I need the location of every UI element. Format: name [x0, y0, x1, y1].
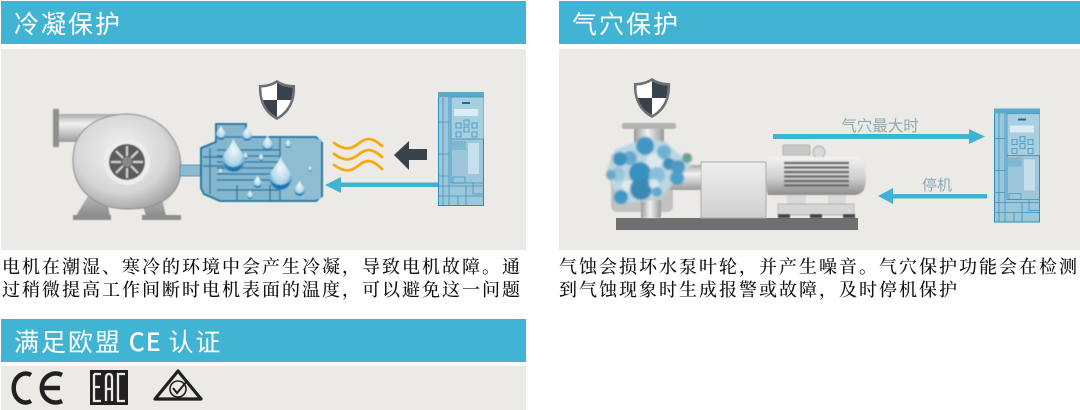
text: condensation description	[2, 253, 522, 302]
arrow: stop	[878, 188, 987, 204]
text: cavitation description: 到气蚀现象时生成报警或故障，及时停机保护	[559, 276, 959, 302]
heading: cavitation protection	[559, 1, 1080, 44]
icon: motor shaft	[180, 165, 202, 176]
icon: cavitation bubbles	[606, 137, 692, 204]
icon: orange heat waves	[334, 139, 382, 170]
icon: coupling guard	[701, 162, 766, 218]
icon: shield	[259, 80, 295, 120]
arrow: max cavitation time	[773, 129, 985, 144]
icon: frequency converter	[994, 108, 1040, 222]
illustration: condensation protection scene	[53, 80, 484, 220]
icon: EAC mark	[90, 370, 128, 405]
panel: condensation illustration background	[1, 49, 526, 250]
label: stop: 停机	[922, 174, 952, 195]
heading: cavitation protection: 气穴保护	[572, 5, 680, 41]
heading: condensation protection	[1, 1, 526, 44]
label: max cavitation time: 气穴最大时	[841, 114, 919, 136]
text: condensation description: 过稍微提高工作间断时电机表面的温度，可以避免这一问题	[2, 276, 522, 302]
icon: frequency converter	[438, 92, 484, 206]
arrow: dark heat arrow	[394, 141, 427, 170]
illustration: cavitation protection scene	[606, 78, 1040, 230]
text: cavitation description: 气蚀会损坏水泵叶轮，并产生噪音。气穴保护功能会在检测	[559, 253, 1079, 279]
icon: RCM mark	[155, 371, 201, 399]
icon: motor	[766, 145, 866, 218]
icon: shield	[634, 78, 670, 118]
text: cavitation description	[559, 253, 1079, 302]
icon: water pump body	[611, 123, 701, 218]
text: condensation description: 电机在潮湿、寒冷的环境中会产生冷凝，导致电机故障。通	[2, 253, 522, 279]
heading: CE certification: 满足欧盟 CE 认证	[14, 323, 222, 359]
icon: wet motor with droplets	[201, 124, 322, 201]
icon: fan pump	[53, 109, 181, 220]
arrow: drive to motor	[325, 177, 438, 193]
heading: CE certification	[1, 319, 526, 362]
heading: condensation protection: 冷凝保护	[14, 5, 122, 41]
icon: base plate	[616, 218, 858, 230]
panel: certification marks background	[1, 366, 526, 410]
icon: CE mark	[14, 374, 62, 402]
panel: cavitation illustration background	[559, 49, 1080, 250]
